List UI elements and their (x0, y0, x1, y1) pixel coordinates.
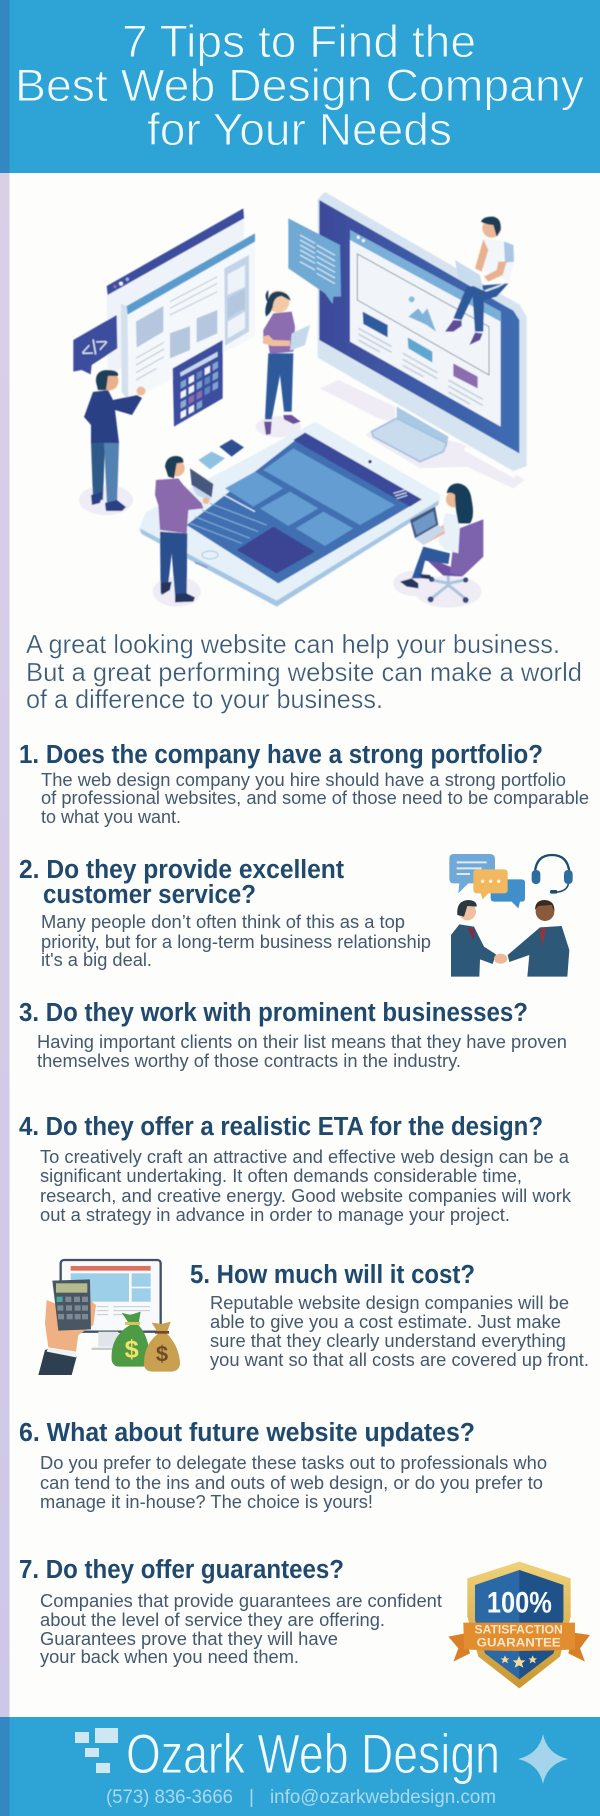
icon: floating app tiles (198, 439, 244, 469)
intro text: A great looking website can help your business. (26, 629, 560, 659)
body: tip 4 (40, 1147, 572, 1225)
icon: satisfaction guarantee badge: SATISFACTION (474, 1622, 563, 1636)
icon: calendar grid (173, 340, 223, 427)
body: tip 2: priority, but for a long-term business relationship (41, 932, 431, 952)
icon: browser windows (107, 208, 255, 402)
icon: sparkle (518, 1734, 568, 1784)
body: tip 4: To creatively craft an attractive and effective web design can be a (40, 1147, 570, 1167)
figure: man with laptop at tablet (153, 456, 213, 607)
title (15, 16, 585, 155)
heading: tip 2: customer service? (43, 881, 256, 909)
icon: tablet with layout (140, 423, 438, 607)
icon: logo squares (75, 1728, 118, 1773)
body: tip 6 (40, 1453, 547, 1512)
body: tip 2 (41, 912, 431, 970)
icon: chat bubble on monitor (288, 218, 341, 304)
body: tip 7: Guarantees prove that they will have (40, 1629, 338, 1649)
heading: tip 2 (19, 856, 344, 909)
body: tip 1: of professional websites, and some of those need to be comparable (41, 788, 589, 808)
icon: desktop monitor (319, 194, 525, 488)
title: 7 Tips to Find the (122, 16, 476, 67)
hero illustration (73, 194, 525, 608)
contact details (106, 1787, 496, 1808)
body: tip 5 (210, 1293, 589, 1370)
title: Best Web Design Company (15, 60, 585, 111)
body: tip 3 (37, 1032, 567, 1071)
footer banner (0, 1717, 600, 1816)
icon: customer service handshake (449, 854, 573, 977)
figure: man pointing at window (79, 370, 146, 515)
body: tip 6: can tend to the ins and outs of web design, or do you prefer to (40, 1473, 543, 1493)
body: tip 4: significant undertaking. It often demands considerable time, (40, 1166, 522, 1186)
body: tip 5: able to give you a cost estimate. Just make (210, 1312, 561, 1332)
body: tip 1: The web design company you hire should have a strong portfolio (41, 770, 566, 790)
body: tip 6: manage it in-house? The choice is yours! (40, 1492, 373, 1512)
panel: tip 6 (19, 1419, 547, 1512)
heading: tip 5: 5. How much will it cost? (190, 1261, 475, 1289)
figure: seated woman with laptop (393, 483, 483, 608)
panel: tip 5 (38, 1260, 589, 1375)
body: tip 6: Do you prefer to delegate these tasks out to professionals who (40, 1453, 547, 1473)
panel: tip 3 (19, 999, 567, 1071)
body: tip 1: to what you want. (41, 807, 181, 827)
icon: satisfaction guarantee badge: 100% (487, 1587, 552, 1620)
heading: tip 4: 4. Do they offer a realistic ETA for the design? (19, 1113, 543, 1141)
left lavender strip (0, 173, 10, 1717)
icon: cost calculator and money bags: $ (125, 1335, 139, 1363)
body: tip 2: it's a big deal. (41, 950, 152, 970)
contact details: info@ozarkwebdesign.com (270, 1787, 496, 1808)
body: tip 1 (41, 770, 589, 827)
icon: cost calculator and money bags: $ (156, 1342, 168, 1367)
icon: satisfaction guarantee badge: GUARANTEE (477, 1636, 561, 1650)
body: tip 4: out a strategy in advance in order to manage your project. (40, 1205, 510, 1225)
body: tip 3: themselves worthy of those contracts in the industry. (37, 1051, 461, 1071)
panel: tip 2 (19, 854, 573, 977)
logo wordmark: Ozark Web Design (126, 1722, 500, 1785)
body: tip 4: research, and creative energy. Good website companies will work (40, 1186, 572, 1206)
panel: tip 7 (19, 1556, 590, 1688)
title: for Your Needs (147, 104, 452, 155)
body: tip 2: Many people don’t often think of this as a top (41, 912, 405, 932)
contact details: (573) 836-3666 (106, 1787, 233, 1808)
icon: satisfaction guarantee badge (448, 1562, 590, 1688)
panel: tip 4 (19, 1113, 572, 1225)
panel: tip 1 (19, 741, 589, 827)
body: tip 5: you want so that all costs are covered up front. (210, 1350, 589, 1370)
icon: cost calculator and money bags (38, 1260, 180, 1375)
body: tip 5: sure that they clearly understand everything (210, 1331, 566, 1351)
heading: tip 1: 1. Does the company have a strong portfolio? (19, 741, 543, 769)
header banner (0, 0, 600, 173)
body: tip 7: about the level of service they are offering. (40, 1610, 385, 1630)
icon: code bubble (73, 315, 117, 374)
body: tip 7: Companies that provide guarantees are confident (40, 1591, 442, 1611)
intro text (26, 629, 582, 714)
heading: tip 7: 7. Do they offer guarantees? (19, 1556, 344, 1584)
body: tip 3: Having important clients on their list means that they have proven (37, 1032, 567, 1052)
body: tip 7 (40, 1591, 442, 1667)
figure: standing woman with tablet (256, 290, 310, 437)
contact details: | (249, 1787, 254, 1808)
body: tip 5: Reputable website design companies will be (210, 1293, 569, 1313)
intro text: But a great performing website can make a world (26, 657, 582, 687)
heading: tip 3: 3. Do they work with prominent businesses? (19, 999, 528, 1027)
body: tip 7: your back when you need them. (40, 1647, 299, 1667)
heading: tip 2: 2. Do they provide excellent (19, 856, 344, 884)
figure: man sitting on monitor with laptop (445, 217, 514, 345)
intro text: of a difference to your business. (26, 684, 383, 714)
heading: tip 6: 6. What about future website updates? (19, 1419, 475, 1447)
icon: code bubble: </> (77, 332, 113, 364)
